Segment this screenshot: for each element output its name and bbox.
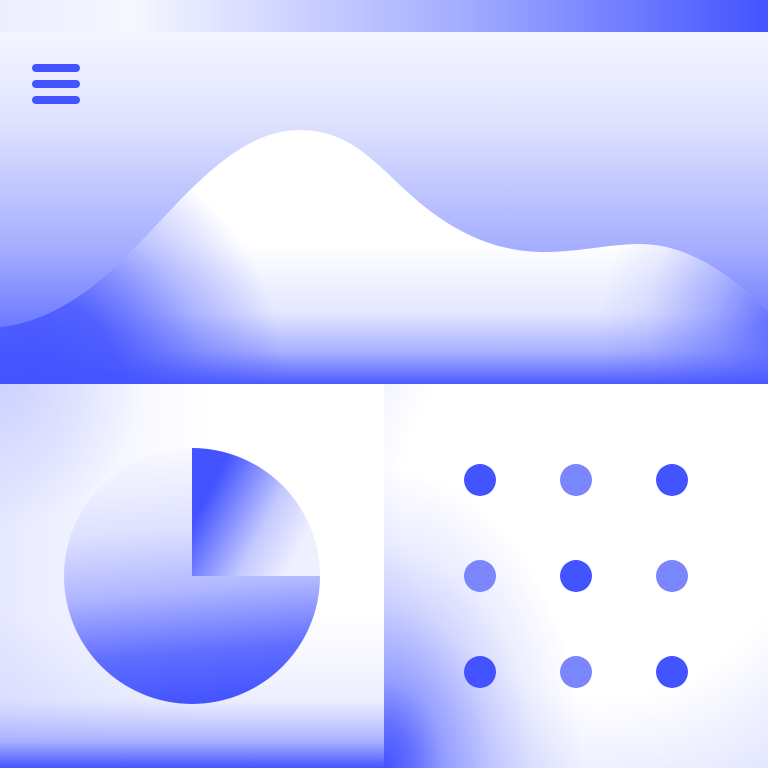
panel: dot grid: [384, 384, 768, 768]
pie chart quarter slice: [192, 448, 320, 576]
icon: hamburger menu: [32, 64, 80, 104]
top gradient bar: [0, 0, 768, 32]
dots matrix: [464, 464, 688, 688]
pie chart main segment: [64, 448, 320, 704]
panel: area chart: [0, 32, 768, 384]
panel: pie chart: [0, 384, 384, 768]
area chart wave: [0, 130, 768, 384]
